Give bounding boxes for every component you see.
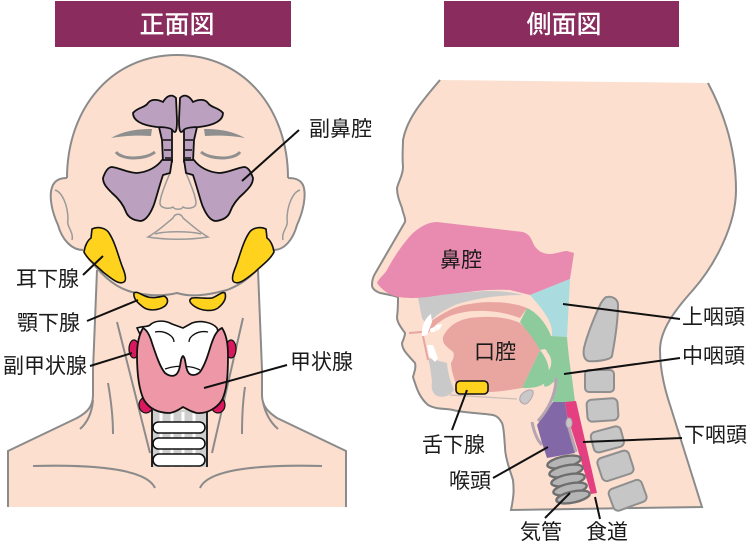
parathyroid glands (129, 340, 236, 413)
header: side view (444, 1, 679, 47)
thyroid (137, 328, 228, 413)
labels (3, 118, 747, 544)
labels: 気管 (520, 521, 562, 544)
labels: 甲状腺 (290, 351, 353, 374)
panel: front view anatomy (8, 55, 346, 507)
arytenoid (566, 418, 572, 428)
labels: 中咽頭 (682, 345, 745, 368)
nose (160, 173, 196, 209)
labels: 口腔 (474, 341, 516, 364)
eyebrows (111, 129, 245, 138)
gray upper jaw (418, 291, 523, 323)
nasopharynx (530, 279, 570, 337)
palate (426, 302, 527, 333)
front body silhouette (8, 55, 346, 507)
nasal cavity (377, 222, 574, 298)
mouth (148, 214, 208, 239)
panel: side view anatomy (372, 80, 736, 512)
labels: 喉頭 (449, 470, 491, 493)
labels: 食道 (586, 521, 628, 544)
ear details (55, 190, 300, 240)
floor of mouth line (450, 395, 517, 399)
trachea side (546, 453, 591, 506)
larynx (537, 402, 575, 458)
front body outline (8, 55, 346, 507)
gray lower jaw (428, 358, 454, 397)
leader lines (83, 130, 682, 519)
thyroid cartilage (137, 321, 222, 378)
header: front view: 正面図 (139, 11, 215, 39)
sinuses left (103, 96, 177, 221)
trachea front (152, 410, 207, 467)
tongue (443, 317, 540, 392)
lip line (409, 331, 428, 360)
labels: 副鼻腔 (309, 118, 372, 141)
labels: 鼻腔 (440, 249, 482, 272)
cartilage details (155, 332, 208, 370)
hyoid (520, 390, 533, 404)
esophagus (565, 401, 597, 494)
green tongue base (522, 350, 549, 388)
header: front view (55, 1, 291, 47)
header: side view: 側面図 (526, 11, 602, 39)
side outline (372, 80, 736, 510)
labels: 上咽頭 (682, 306, 745, 329)
labels: 舌下腺 (422, 434, 485, 457)
labels: 耳下腺 (16, 268, 79, 291)
larynx cartilage (532, 378, 576, 452)
sinuses right (179, 96, 253, 221)
labels: 副甲状腺 (3, 355, 87, 378)
eyes (116, 152, 240, 158)
labels: 下咽頭 (684, 424, 747, 447)
jaw line (85, 250, 258, 295)
neck lines (33, 318, 322, 488)
side silhouette (372, 80, 736, 510)
vertebrae (584, 297, 648, 512)
oropharynx (520, 308, 575, 402)
labels: 顎下腺 (17, 312, 80, 335)
parotid and submandibular glands (84, 228, 274, 310)
sublingual gland (456, 381, 488, 394)
teeth (422, 314, 442, 362)
